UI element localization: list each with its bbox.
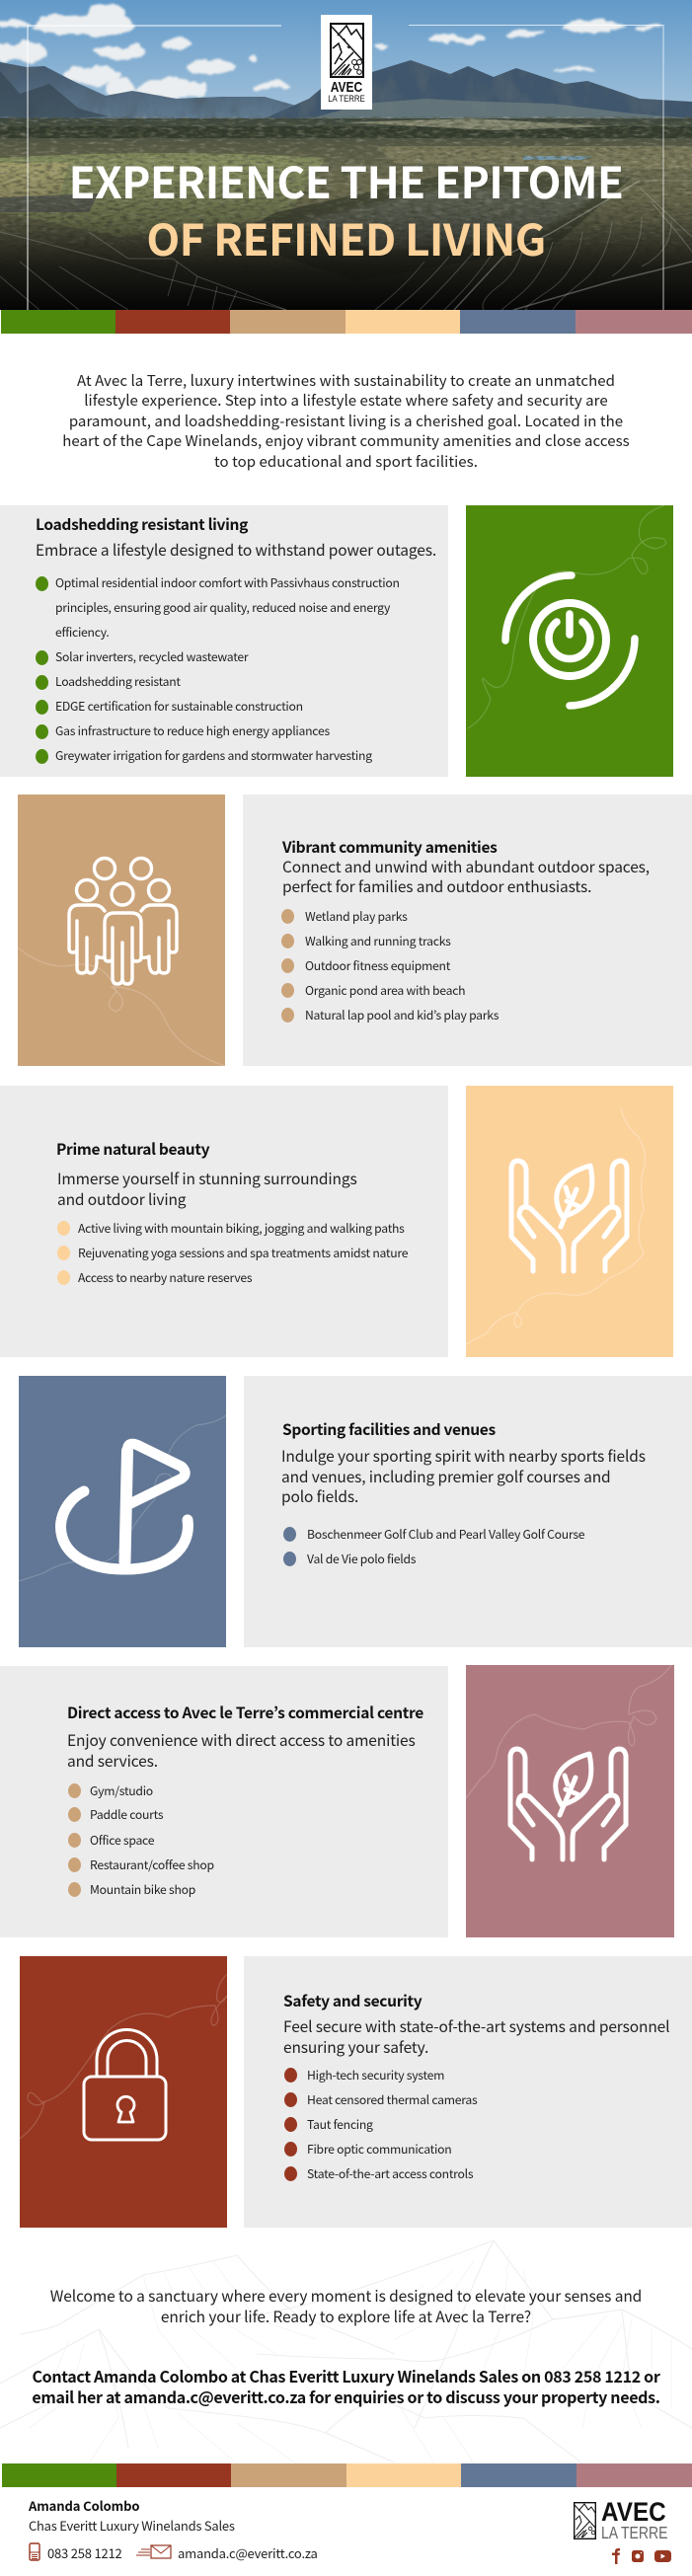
- subheading: and outdoor living: [57, 1188, 186, 1210]
- bullet list: Restaurant/coffee shop: [90, 1856, 214, 1873]
- heading: Prime natural beauty: [56, 1138, 209, 1160]
- intro paragraph: to top educational and sport facilities.: [214, 451, 478, 472]
- bullet list: EDGE certification for sustainable construction: [55, 697, 303, 715]
- bullet list: [283, 1525, 584, 1567]
- icon tile: people: [18, 795, 225, 1066]
- footer logo: [574, 2497, 667, 2542]
- logo wordmark: [328, 79, 365, 105]
- bullet list: Access to nearby nature reserves: [78, 1268, 252, 1286]
- icon tile: padlock: [20, 1956, 227, 2228]
- subheading: [281, 1445, 646, 1507]
- footer: contact name: Amanda Colombo: [29, 2496, 139, 2515]
- email address: amanda.c@everitt.co.za: [178, 2543, 318, 2562]
- far mountains: [0, 62, 326, 128]
- subheading: [67, 1729, 416, 1772]
- heading: Vibrant community amenities: [282, 836, 498, 858]
- bullet list: Heat censored thermal cameras: [307, 2090, 477, 2108]
- subheading: Indulge your sporting spirit with nearby sports fields: [281, 1445, 646, 1467]
- bullet list: Active living with mountain biking, jogging and walking paths: [78, 1219, 405, 1237]
- footer logo: LA TERRE: [601, 2523, 667, 2542]
- bullet list: Loadshedding resistant: [55, 672, 181, 690]
- subheading: [57, 1168, 357, 1210]
- bullet list: [57, 1219, 408, 1286]
- heading: Sporting facilities and venues: [282, 1418, 496, 1440]
- panel: loadshedding resistant living: [0, 505, 448, 777]
- title: [69, 148, 623, 268]
- icon tile: hands holding leaf, peach: [466, 1086, 673, 1357]
- icon tile: golf flag: [19, 1376, 226, 1647]
- bullet list: [284, 2066, 478, 2182]
- intro paragraph: At Avec la Terre, luxury intertwines with sustainability to create an unmatched: [77, 370, 615, 391]
- contact call to action: email her at amanda.c@everitt.co.za for enquiries or to discuss your property needs.: [32, 2385, 660, 2408]
- bullet list: Office space: [90, 1831, 154, 1849]
- bullet list: Organic pond area with beach: [305, 981, 465, 999]
- intro paragraph: [62, 370, 630, 472]
- logo wordmark: LA TERRE: [328, 94, 365, 105]
- subheading: [282, 856, 650, 897]
- icon tile: power button: [466, 505, 673, 777]
- bullet list: [36, 573, 400, 764]
- subheading: and services.: [67, 1750, 158, 1772]
- hero photo: mountains and winelands: [0, 0, 692, 310]
- title: OF REFINED LIVING: [146, 205, 546, 268]
- subheading: Enjoy convenience with direct access to amenities: [67, 1729, 416, 1751]
- heading: Direct access to Avec le Terre’s commercial centre: [67, 1702, 423, 1723]
- bullet list: Boschenmeer Golf Club and Pearl Valley Golf Course: [307, 1525, 584, 1543]
- footer: agency: Chas Everitt Luxury Winelands Sales: [29, 2516, 235, 2535]
- bullet list: Greywater irrigation for gardens and stormwater harvesting: [55, 746, 372, 764]
- panel: direct access to commercial centre: [0, 1666, 448, 1937]
- intro paragraph: heart of the Cape Winelands, enjoy vibrant community amenities and close access: [62, 430, 630, 451]
- subheading: polo fields.: [281, 1485, 358, 1507]
- panel: vibrant community amenities: [243, 795, 692, 1066]
- subheading: Connect and unwind with abundant outdoor spaces,: [282, 856, 650, 877]
- logo: Avec la Terre: [321, 15, 372, 110]
- footer logo emblem: [574, 2502, 596, 2539]
- subheading: Immerse yourself in stunning surroundings: [57, 1168, 357, 1189]
- logo wordmark: AVEC: [331, 79, 362, 96]
- panel: safety and security: [244, 1956, 692, 2228]
- subheading: perfect for families and outdoor enthusiasts.: [282, 875, 591, 897]
- colour bar: top: [1, 310, 692, 334]
- intro paragraph: paramount, and loadshedding-resistant living is a cherished goal. Located in the: [69, 411, 623, 431]
- bullet list: Taut fencing: [307, 2115, 373, 2133]
- bullet list: Val de Vie polo fields: [307, 1550, 416, 1567]
- bullet list: State-of-the-art access controls: [307, 2164, 473, 2182]
- closing paragraph: Welcome to a sanctuary where every moment is designed to elevate your senses and: [50, 2285, 642, 2307]
- bullet list: principles, ensuring good air quality, reduced noise and energy: [55, 598, 390, 616]
- valley floor: [0, 118, 692, 310]
- bullet list: [281, 907, 499, 1023]
- subheading: Embrace a lifestyle designed to withstand power outages.: [36, 539, 436, 561]
- clouds: [0, 6, 662, 99]
- logo emblem: [330, 23, 364, 78]
- contour lines: [0, 181, 692, 311]
- bullet list: Fibre optic communication: [307, 2140, 451, 2158]
- phone number: 083 258 1212: [47, 2543, 122, 2562]
- panel: sporting facilities and venues: [244, 1376, 692, 1647]
- bullet list: Solar inverters, recycled wastewater: [55, 647, 248, 665]
- contact call to action: Contact Amanda Colombo at Chas Everitt Luxury Winelands Sales on 083 258 1212 or: [32, 2364, 660, 2387]
- bullet list: Wetland play parks: [305, 907, 408, 925]
- bullet list: [68, 1781, 214, 1898]
- bullet list: efficiency.: [55, 623, 109, 641]
- heading: Loadshedding resistant living: [36, 513, 248, 535]
- background: mountain line art: [0, 2240, 692, 2463]
- bullet list: Paddle courts: [90, 1805, 163, 1823]
- bullet list: Outdoor fitness equipment: [305, 956, 450, 974]
- closing paragraph: [50, 2285, 642, 2327]
- bullet list: Gym/studio: [90, 1781, 153, 1799]
- hero frame lines: [28, 25, 663, 310]
- subheading: and venues, including premier golf courses and: [281, 1466, 611, 1487]
- contact call to action: [32, 2364, 660, 2408]
- bullet list: Rejuvenating yoga sessions and spa treatments amidst nature: [78, 1244, 408, 1261]
- icon: email: [136, 2544, 172, 2559]
- footer logo wordmark: AVEC: [601, 2497, 666, 2527]
- subheading: Feel secure with state-of-the-art systems and personnel: [283, 2015, 669, 2037]
- social icons: [612, 2548, 671, 2564]
- bullet list: Natural lap pool and kid’s play parks: [305, 1006, 499, 1023]
- heading: Safety and security: [283, 1990, 422, 2011]
- icon: phone: [29, 2542, 40, 2561]
- bullet list: Mountain bike shop: [90, 1880, 195, 1898]
- closing paragraph: enrich your life. Ready to explore life at Avec la Terre?: [161, 2306, 531, 2327]
- bullet list: Walking and running tracks: [305, 932, 451, 949]
- bullet list: High-tech security system: [307, 2066, 444, 2084]
- bullet list: Optimal residential indoor comfort with Passivhaus construction: [55, 573, 400, 591]
- panel: prime natural beauty: [0, 1086, 448, 1357]
- icon tile: hands holding leaf, mauve: [466, 1665, 674, 1937]
- subheading: [283, 2015, 669, 2058]
- intro paragraph: lifestyle experience. Step into a lifestyle estate where safety and security are: [84, 390, 608, 411]
- title: EXPERIENCE THE EPITOME: [69, 148, 623, 211]
- bullet list: Gas infrastructure to reduce high energy appliances: [55, 721, 330, 739]
- subheading: ensuring your safety.: [283, 2036, 428, 2058]
- colour bar: footer: [2, 2463, 692, 2487]
